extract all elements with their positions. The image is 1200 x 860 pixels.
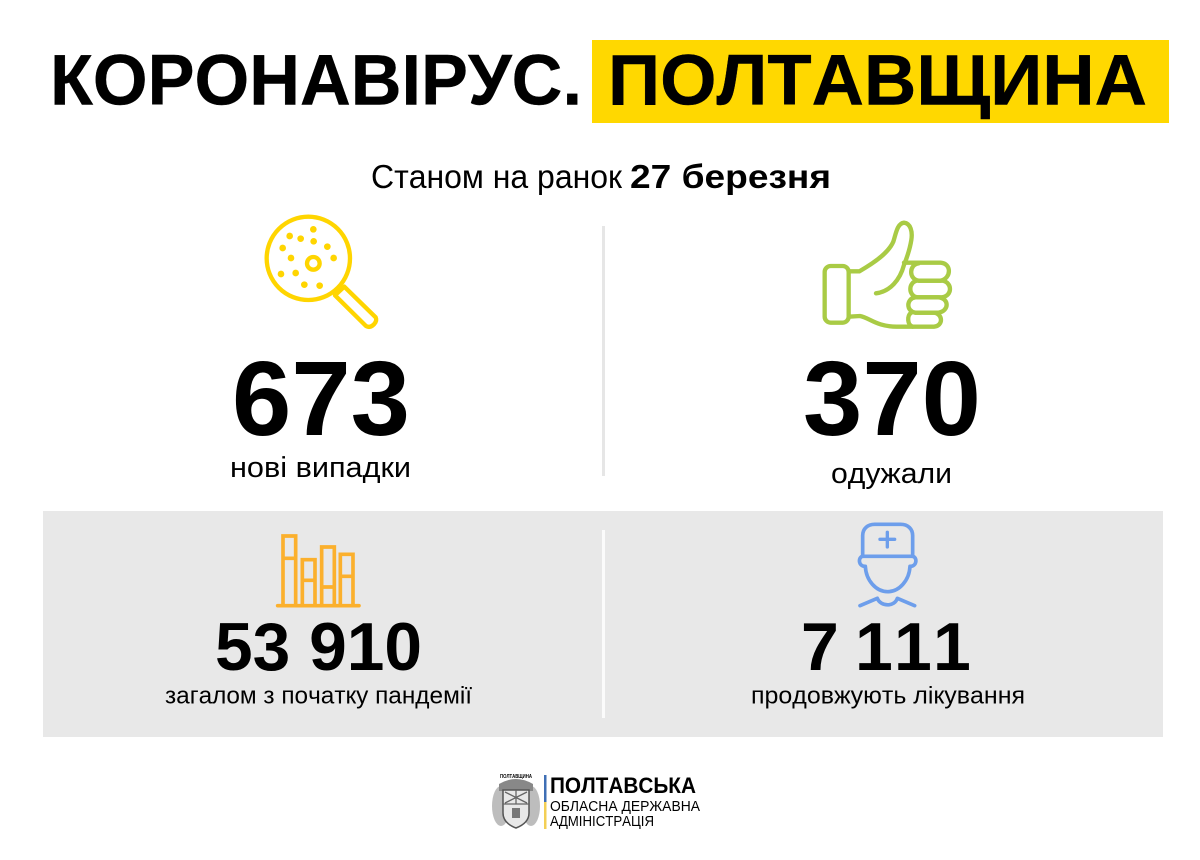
- title: КОРОНАВІРУС.: [50, 42, 582, 120]
- subtitle: date: Станом на ранок: [371, 159, 622, 196]
- icon: bar chart: [278, 536, 359, 606]
- title: ПОЛТАВЩИНА: [608, 42, 1147, 120]
- subtitle: date: 27 березня: [630, 159, 831, 196]
- icon: thumbs up: [825, 223, 950, 327]
- subtitle: date: [371, 159, 831, 196]
- label: new cases: нові випадки: [230, 452, 411, 484]
- icon: coat of arms: [492, 774, 540, 828]
- number: continuing treatment: 7 111: [801, 609, 971, 685]
- logo: Poltava regional administration: [492, 773, 700, 830]
- logo: Poltava regional administration: ПОЛТАВСЬКА: [550, 773, 696, 798]
- panel: continuing treatment: [751, 524, 1025, 710]
- label: recovered: одужали: [831, 458, 952, 490]
- number: total: 53 910: [215, 609, 422, 685]
- label: continuing treatment: продовжують лікування: [751, 682, 1025, 710]
- panel: gray totals band: [43, 511, 1163, 737]
- panel: total since pandemic start: [165, 536, 472, 710]
- panel: recovered: [803, 223, 981, 490]
- title: [50, 40, 1169, 123]
- number: new cases: 673: [232, 340, 410, 458]
- logo: Poltava regional administration: ОБЛАСНА ДЕРЖАВНА: [550, 798, 700, 815]
- panel: new cases: [230, 217, 411, 484]
- label: total: загалом з початку пандемії: [165, 682, 472, 710]
- icon: magnifier with virus: [267, 217, 376, 327]
- number: recovered: 370: [803, 340, 981, 458]
- icon: doctor: [859, 524, 916, 606]
- logo: Poltava regional administration: АДМІНІСТРАЦІЯ: [550, 813, 654, 830]
- icon: coat of arms: ПОЛТАВЩИНА: [500, 774, 532, 780]
